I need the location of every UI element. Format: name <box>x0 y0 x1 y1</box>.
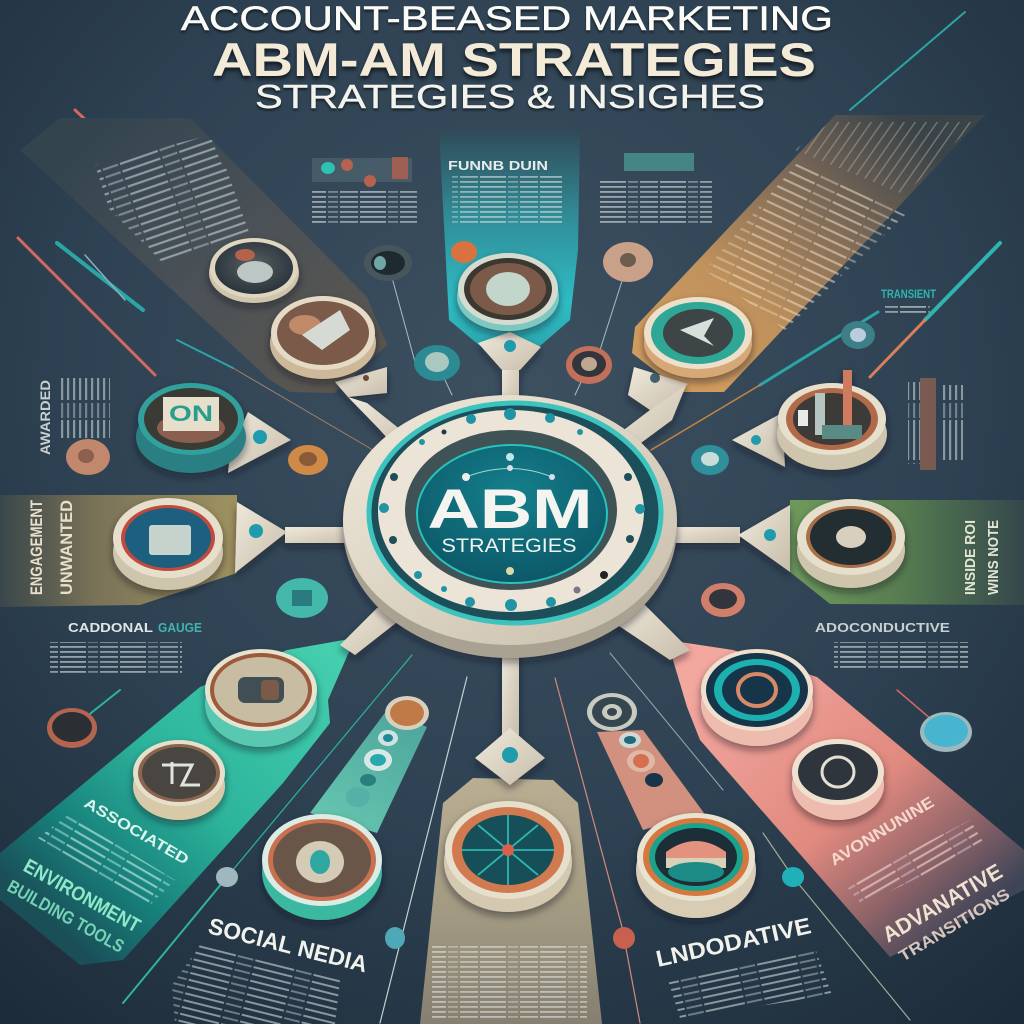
panel: left strategy <box>0 495 237 607</box>
title line 1: ACCOUNT-BEASED MARKETING <box>181 0 833 38</box>
title line 2: ABM-AM STRATEGIES <box>212 33 816 86</box>
icon: left coin upper <box>136 383 246 473</box>
text: bottom-left faux copy <box>38 815 175 905</box>
icon: node right teal <box>691 445 729 475</box>
icon: right coin upper <box>777 370 887 470</box>
icon: node lower-right <box>701 583 745 617</box>
icon: top-left coin 1 <box>209 238 299 303</box>
icon: top-right coin <box>644 297 752 378</box>
arrow: top <box>478 332 541 370</box>
panel: bottom-center strategy <box>420 778 602 1024</box>
text: lower-left note: CADDONAL <box>68 620 153 635</box>
icon: node top-left grey <box>364 245 412 281</box>
text: bottom-right heading: AVONNUNINE <box>827 794 938 869</box>
title <box>181 0 833 115</box>
icon: node lower-left teal <box>276 578 328 618</box>
arrow: upper-left <box>335 367 387 397</box>
text: top-center-left note <box>312 157 417 226</box>
icon: top-center coin <box>457 253 559 331</box>
icon: node teal upper-left <box>414 345 460 381</box>
title line 3: STRATEGIES & INSIGHES <box>255 78 765 115</box>
text: top-right faux copy <box>705 163 905 330</box>
icon: small line markers <box>216 867 804 949</box>
icon: top-right node <box>841 321 875 349</box>
icon: node left tan <box>66 439 110 475</box>
icon: left coin <box>113 498 223 590</box>
icon: bottom-right coin 2 <box>792 739 884 820</box>
text: right vertical label: INSIDE ROI <box>962 520 979 595</box>
arrow: upper-right <box>628 367 688 410</box>
icon: wedge right nodes <box>587 693 663 787</box>
spokes and arrow connectors <box>228 332 790 785</box>
text: top-right note <box>881 287 937 314</box>
text: bottom-left label 2: BUILDING TOOLS <box>4 876 127 957</box>
hub dots <box>379 408 645 611</box>
arrow: right <box>738 505 790 572</box>
text: upper-left vertical note <box>37 378 110 455</box>
icon: node left orange <box>288 445 328 475</box>
small nodes <box>47 242 972 949</box>
text: lower-left note <box>50 620 202 674</box>
text: bottom-right label 2: TRANSITIONS <box>896 886 1013 965</box>
icon: node far right <box>920 712 972 752</box>
panel: bottom mid-left wedge <box>310 710 427 833</box>
text: top-left faux copy <box>105 165 250 265</box>
icon: left coin upper: ON <box>169 401 213 426</box>
icon: wedge left nodes <box>346 696 429 807</box>
panel: bottom mid-right wedge <box>597 730 704 830</box>
arrow: right upper <box>732 413 785 467</box>
text: social media copy <box>172 945 340 1024</box>
text: left vertical label <box>27 500 76 595</box>
text: left vertical label: ENGAGEMENT <box>27 500 46 595</box>
panel: bottom-right strategy <box>667 640 1024 965</box>
text: upper-left vertical note: AWARDED <box>37 380 53 455</box>
text: top-right note: TRANSIENT <box>881 287 937 301</box>
arrow: left <box>235 502 287 573</box>
icon: node tan <box>603 242 653 282</box>
arrow dots <box>249 340 776 763</box>
text: social media label: SOCIAL NEDIA <box>206 913 370 977</box>
icon: right coin <box>797 499 905 588</box>
central hub: ABM Strategies <box>343 395 677 658</box>
text: top-center heading: FUNNB DUIN <box>448 158 548 173</box>
text: lower-right note <box>815 620 968 670</box>
text: bottom-center faux copy <box>432 945 587 1020</box>
text: upper-right vertical note <box>908 378 963 470</box>
hub cream ring <box>378 410 644 612</box>
hub label ABM: ABM <box>428 477 592 540</box>
icon: node salmon upper-right <box>566 346 612 384</box>
hub teal ring <box>369 403 661 623</box>
hub label Strategies: STRATEGIES <box>442 536 576 557</box>
panel: right strategy <box>790 500 1024 605</box>
panel: top-left strategy <box>20 118 387 393</box>
icon: node bottom-left <box>47 708 97 748</box>
icon: bottom-left coin 2 <box>133 740 225 820</box>
panel: bottom-left strategy <box>0 638 355 965</box>
text: top-right rays <box>795 122 975 195</box>
icon: bottom-center coin <box>444 801 572 912</box>
icon: bottom-left coin 1 <box>205 649 317 747</box>
text: innovative label: LNDODATIVE <box>653 912 813 972</box>
text: left vertical label: UNWANTED <box>57 500 76 595</box>
icon: top-left coin 2 <box>270 296 376 379</box>
icon: bottom mid-right coin <box>636 813 756 918</box>
text: lower-left note: GAUGE <box>158 620 202 635</box>
hub inner teal disc <box>405 430 617 590</box>
text: bottom-right faux copy <box>845 820 985 905</box>
icon: top-center small marker <box>451 241 477 263</box>
text: bottom-right label 1: ADVANATIVE <box>878 859 1007 947</box>
text: bottom-left heading: ASSOCIATED <box>81 795 192 869</box>
text: bottom-left label 1: ENVIRONMENT <box>20 855 144 937</box>
text: top-center-right note <box>600 153 712 226</box>
text: right vertical label: WINS NOTE <box>985 520 1002 595</box>
text: top-left heading streak <box>95 135 222 205</box>
arrow: left upper <box>228 412 291 473</box>
text: innovative copy <box>668 948 832 1018</box>
text: right vertical label <box>962 520 1002 595</box>
text: lower-right note: ADOCONDUCTIVE <box>815 620 950 635</box>
panel: top-right strategy <box>632 115 985 392</box>
icon: bottom-right coin 1 <box>701 649 813 746</box>
arrow: bottom <box>475 728 545 785</box>
icon: bottom mid-left coin <box>262 814 382 920</box>
panel: top-center strategy <box>439 130 580 346</box>
text: top-center faux copy <box>452 176 562 226</box>
